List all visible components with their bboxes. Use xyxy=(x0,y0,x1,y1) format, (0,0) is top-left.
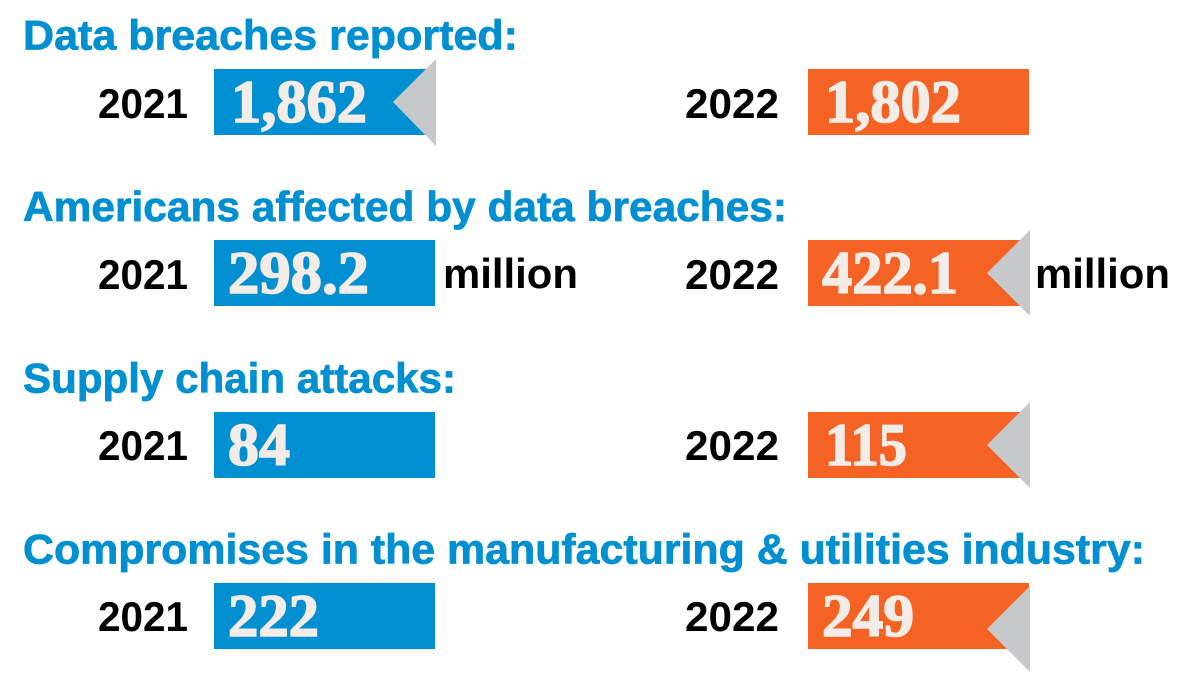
higher marker triangle xyxy=(987,230,1030,316)
unit 2021: million xyxy=(443,250,578,297)
higher marker triangle xyxy=(987,402,1030,488)
section: Americans affected xyxy=(23,183,1170,316)
value 2022: 115 xyxy=(825,412,907,478)
value 2021: 222 xyxy=(228,583,319,649)
bar 2022 xyxy=(808,412,1029,478)
higher marker triangle xyxy=(987,586,1030,672)
bar 2022 xyxy=(808,240,1029,306)
higher marker triangle xyxy=(393,59,436,146)
bar 2021 xyxy=(214,240,435,306)
bar 2022 xyxy=(808,69,1029,135)
year label 2022: 2022 xyxy=(685,422,779,469)
bar 2022 xyxy=(808,583,1029,649)
value 2022: 249 xyxy=(822,583,914,649)
year label 2021: 2021 xyxy=(98,80,188,127)
heading: Americans affected by data breaches: xyxy=(23,183,787,230)
bar 2021 xyxy=(214,69,435,135)
value 2021: 84 xyxy=(228,412,290,478)
heading: Compromises in the manufacturing & utilities industry: xyxy=(23,526,1145,572)
value 2021: 1,862 xyxy=(231,69,367,135)
year label 2022: 2022 xyxy=(685,80,779,127)
year label 2021: 2021 xyxy=(98,422,188,469)
bar 2021 xyxy=(214,583,435,649)
section: supply chain attacks xyxy=(23,354,1030,488)
bar 2021 xyxy=(214,412,435,478)
heading: Supply chain attacks: xyxy=(23,354,456,402)
value 2022: 1,802 xyxy=(825,69,961,135)
section: manufacturing and utilities compromises xyxy=(23,526,1145,672)
year label 2022: 2022 xyxy=(685,593,779,640)
heading: Data breaches reported: xyxy=(23,12,518,58)
value 2021: 298.2 xyxy=(228,240,369,306)
section: data breaches reported xyxy=(23,12,1029,146)
value 2022: 422.1 xyxy=(822,240,958,306)
year label 2022: 2022 xyxy=(685,251,779,298)
unit 2022: million xyxy=(1035,250,1170,297)
year label 2021: 2021 xyxy=(98,593,188,640)
year label 2021: 2021 xyxy=(98,251,188,298)
